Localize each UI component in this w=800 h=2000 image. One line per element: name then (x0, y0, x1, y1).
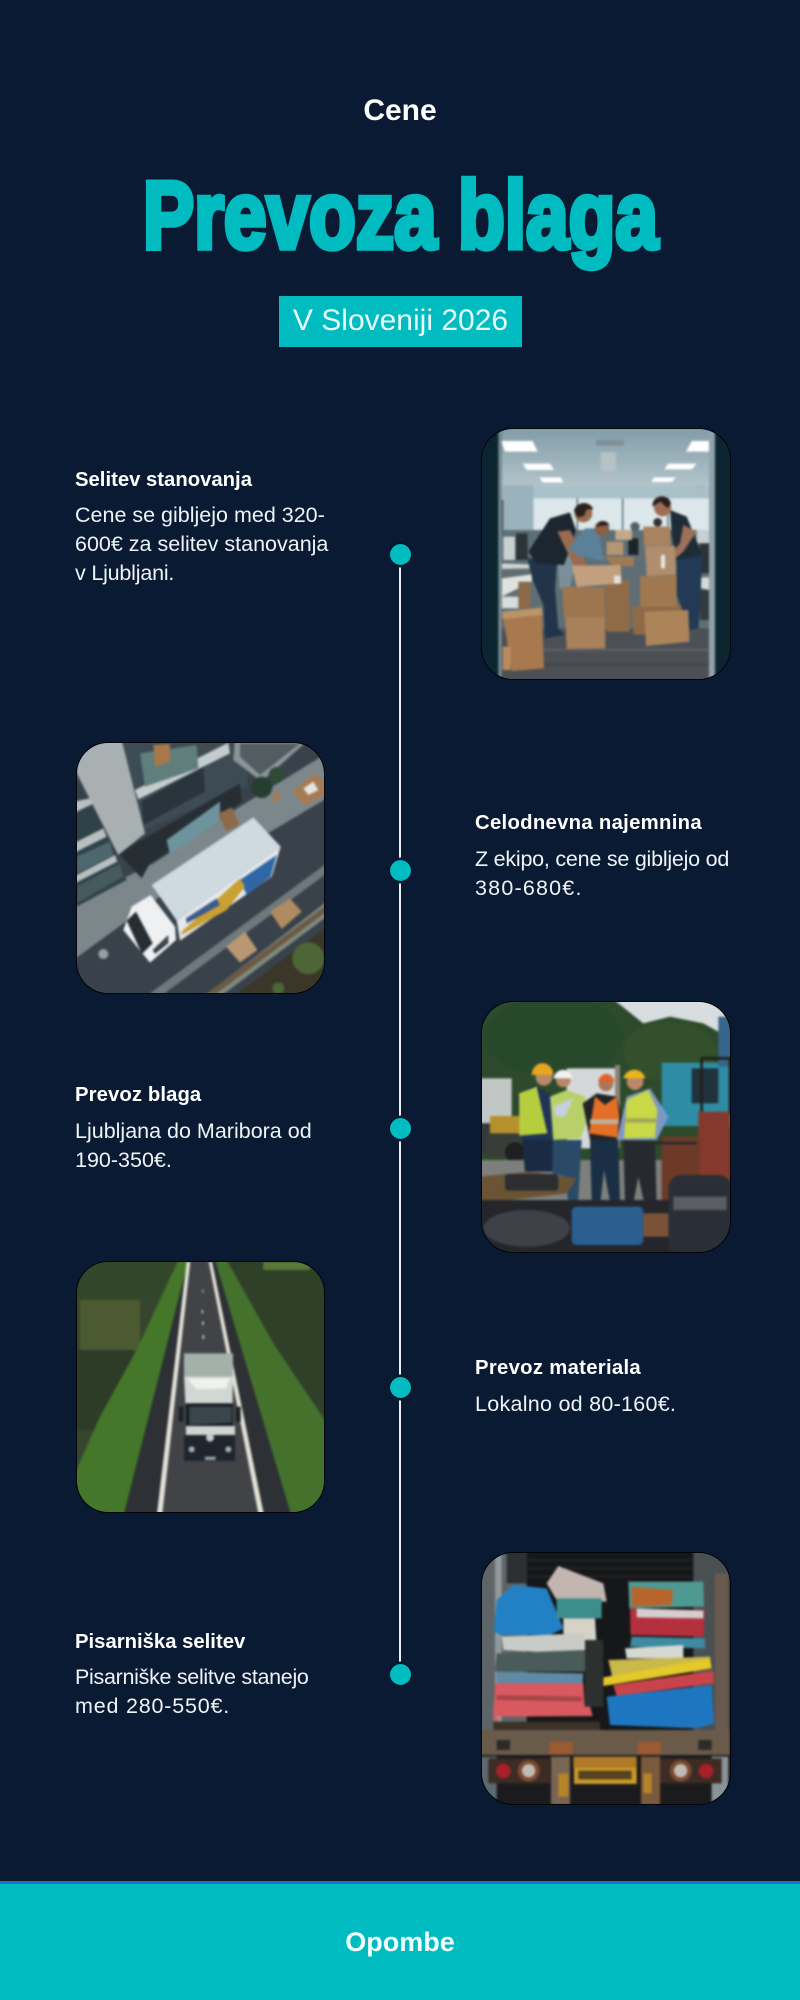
description: 380-680€. (475, 876, 583, 900)
photo: truck load of wrapped goods (481, 1552, 731, 1805)
description: Pisarniške selitve stanejo (75, 1665, 309, 1689)
heading: Prevoz blaga (75, 1084, 201, 1106)
photo: workers in safety vests at a site (481, 1001, 731, 1253)
description: Cene se gibljejo med 320- (75, 503, 325, 527)
description: Ljubljana do Maribora od (75, 1119, 312, 1143)
text block: Prevoz materiala (475, 1357, 676, 1416)
text block: Prevoz blaga (75, 1084, 312, 1172)
footer band: Opombe: Opombe (345, 1927, 455, 1957)
description: 190-350€. (75, 1148, 172, 1172)
timeline dot 3 (388, 1117, 412, 1140)
timeline dot 4 (388, 1376, 412, 1399)
description (75, 1665, 309, 1718)
badge: V Sloveniji 2026 (279, 296, 522, 347)
text block: Celodnevna najemnina (475, 812, 729, 900)
timeline (389, 543, 412, 1686)
description (75, 503, 328, 585)
description: med 280-550€. (75, 1694, 230, 1718)
photo: moving truck from above (76, 742, 325, 994)
text block: Pisarniška selitev (75, 1631, 309, 1718)
description (475, 847, 729, 900)
heading: Prevoz materiala (475, 1357, 641, 1379)
description: v Ljubljani. (75, 561, 174, 585)
description (75, 1119, 312, 1172)
heading: Selitev stanovanja (75, 469, 252, 491)
description: Z ekipo, cene se gibljejo od (475, 847, 729, 871)
badge: V Sloveniji 2026: V Sloveniji 2026 (293, 304, 508, 337)
timeline dot 5 (388, 1663, 412, 1686)
photo: truck on a rural road (76, 1261, 325, 1513)
description: Lokalno od 80-160€. (475, 1392, 676, 1416)
text block: Selitev stanovanja (75, 469, 328, 585)
subtitle: Cene: Cene (363, 94, 437, 127)
heading: Celodnevna najemnina (475, 812, 702, 834)
timeline dot 1 (388, 543, 412, 566)
heading: Pisarniška selitev (75, 1631, 245, 1653)
description: 600€ za selitev stanovanja (75, 532, 328, 556)
timeline line (399, 555, 401, 1675)
footer band: Opombe (0, 1881, 800, 2000)
timeline dot 2 (388, 859, 412, 882)
photo: office move with cardboard boxes (481, 428, 731, 680)
